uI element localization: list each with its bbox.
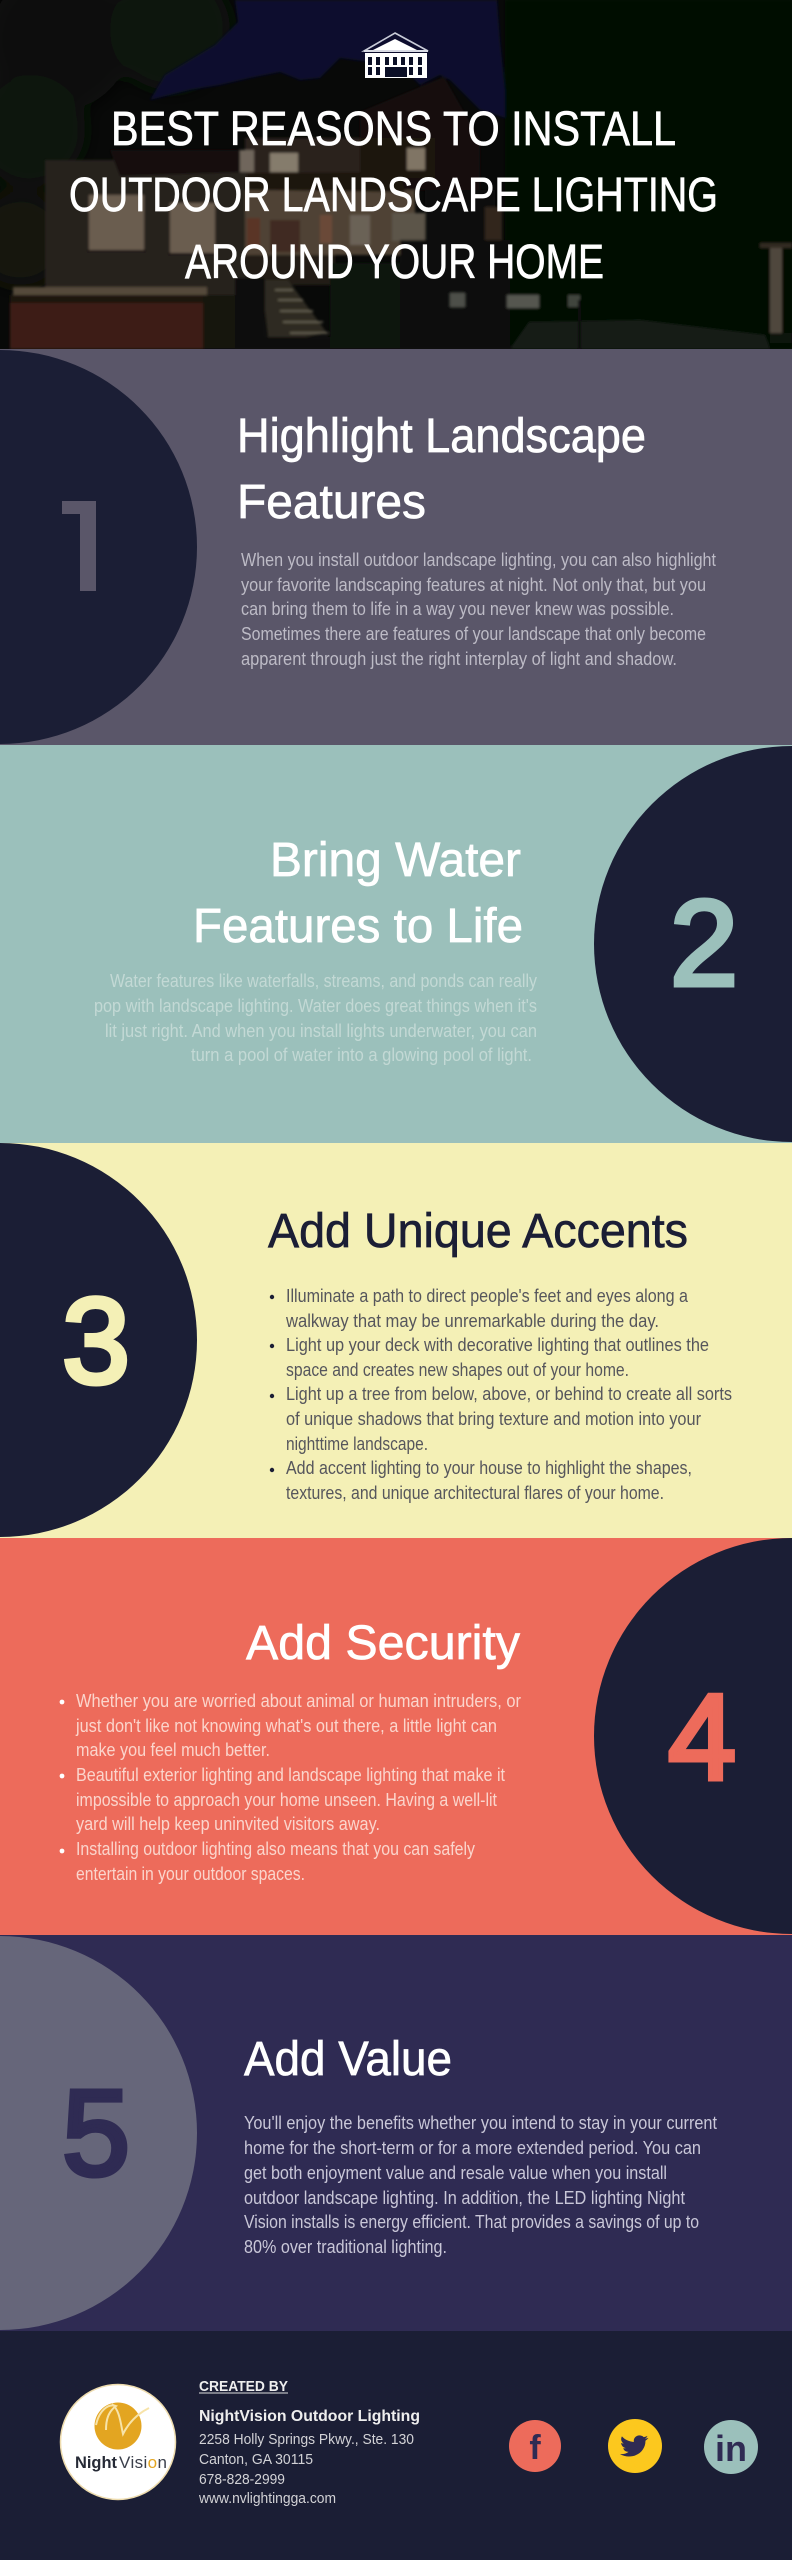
bullet list 4: yard will help keep uninvited visitors away.	[76, 1814, 380, 1834]
heading 2: Features to Life	[193, 900, 523, 953]
number circle 3: 3	[62, 1273, 130, 1409]
bullet list 4: Installing outdoor lighting also means that you can safely	[76, 1839, 475, 1859]
credits text: CREATED BY	[199, 2379, 288, 2395]
bullet list 4: make you feel much better.	[76, 1740, 270, 1760]
icon: linkedin: in	[715, 2428, 747, 2469]
panel 2: bring water features to life	[0, 745, 792, 1143]
body text 1	[241, 550, 716, 669]
bullet list 4: Beautiful exterior lighting and landscape lighting that make it	[76, 1765, 505, 1785]
footer panel	[0, 2331, 792, 2560]
body text 2: lit just right. And when you install lights underwater, you can	[105, 1021, 537, 1041]
credits text	[198, 2379, 420, 2507]
credits text: Canton, GA 30115	[199, 2452, 313, 2468]
body text 1: apparent through just the right interplay of light and shadow.	[241, 649, 677, 669]
bullet list 4	[60, 1691, 521, 1884]
heading 5: Add Value	[244, 2033, 452, 2086]
number circle 2	[594, 746, 792, 1142]
icon: facebook: f	[529, 2429, 541, 2467]
icon: house	[364, 33, 428, 78]
logo: NightVision: Vision	[119, 2453, 167, 2472]
bullet list 3: Add accent lighting to your house to highlight the shapes,	[286, 1458, 692, 1478]
body text 5: outdoor landscape lighting. In addition, the LED lighting Night	[244, 2188, 685, 2208]
body text 5	[244, 2113, 717, 2257]
credits text: www.nvlightingga.com	[198, 2491, 336, 2507]
body text 1: your favorite landscaping features at night. Not only that, but you	[241, 575, 706, 595]
credits text: 2258 Holly Springs Pkwy., Ste. 130	[199, 2432, 414, 2448]
body text 1: When you install outdoor landscape lighting, you can also highlight	[241, 550, 716, 570]
bullet list 3: textures, and unique architectural flares of your home.	[286, 1483, 664, 1503]
heading 1: Features	[237, 476, 426, 529]
heading 1	[237, 410, 646, 529]
body text 2	[94, 971, 537, 1065]
body text 5: get both enjoyment value and resale value when you install	[244, 2163, 667, 2183]
body text 1: Sometimes there are features of your landscape that only become	[241, 624, 706, 644]
title: BEST REASONS TO INSTALL	[111, 103, 676, 156]
body text 5: You'll enjoy the benefits whether you intend to stay in your current	[244, 2113, 717, 2133]
credits text: 678-828-2999	[199, 2472, 285, 2488]
number circle 1: 1	[28, 479, 96, 615]
heading 3: Add Unique Accents	[268, 1205, 688, 1258]
icon: facebook	[509, 2420, 561, 2472]
number circle 4	[594, 1538, 792, 1934]
panel 3: add unique accents	[0, 1143, 792, 1538]
panel 5: add value	[0, 1935, 792, 2331]
number circle 3	[0, 1143, 197, 1537]
credits text: NightVision Outdoor Lighting	[199, 2408, 420, 2425]
body text 5: 80% over traditional lighting.	[244, 2237, 447, 2257]
body text 2: pop with landscape lighting. Water does great things when it's	[94, 996, 537, 1016]
body text 5: home for the short-term or for a more extended period. You can	[244, 2138, 701, 2158]
body text 2: Water features like waterfalls, streams, and ponds can really	[110, 971, 537, 991]
bullet list 3: nighttime landscape.	[286, 1434, 428, 1454]
bullet list 3: of unique shadows that bring texture and motion into your	[286, 1409, 701, 1429]
body text 1: can bring them to life in a way you never knew was possible.	[241, 599, 674, 619]
heading 4: Add Security	[246, 1617, 520, 1670]
bullet list 4: impossible to approach your home unseen. Having a well-lit	[76, 1790, 497, 1810]
panel 4: add security	[0, 1538, 792, 1935]
number circle 4: 4	[668, 1669, 736, 1805]
body text 2: turn a pool of water into a glowing pool of light.	[191, 1045, 532, 1065]
bullet list 3: Light up a tree from below, above, or behind to create all sorts	[286, 1384, 732, 1404]
body text 5: Vision installs is energy efficient. That provides a savings of up to	[244, 2212, 699, 2232]
bullet list 3: walkway that may be unremarkable during the day.	[285, 1311, 659, 1331]
header panel	[0, 0, 792, 349]
logo: NightVision	[60, 2384, 176, 2500]
number circle 2: 2	[670, 875, 738, 1011]
heading 1: Highlight Landscape	[237, 410, 646, 463]
bullet list 3: Illuminate a path to direct people's feet and eyes along a	[286, 1286, 689, 1306]
icon: twitter	[608, 2419, 662, 2473]
icon: linkedin	[704, 2420, 758, 2474]
heading 2	[193, 834, 523, 953]
panel 1: highlight landscape features	[0, 349, 792, 745]
logo: NightVision: Night	[75, 2453, 117, 2472]
heading 2: Bring Water	[270, 834, 521, 887]
number circle 1	[0, 350, 197, 744]
number circle 5: 5	[62, 2065, 130, 2201]
bullet list 4: just don't like not knowing what's out there, a little light can	[75, 1716, 497, 1736]
bullet list 4: Whether you are worried about animal or human intruders, or	[76, 1691, 521, 1711]
title	[69, 103, 718, 289]
bullet list 3	[270, 1286, 732, 1503]
bullet list 3: space and creates new shapes out of your home.	[286, 1360, 629, 1380]
bullet list 3: Light up your deck with decorative lighting that outlines the	[286, 1335, 709, 1355]
night photo of a lit house	[0, 0, 792, 349]
title: AROUND YOUR HOME	[185, 236, 604, 289]
number circle 5	[0, 1936, 197, 2330]
bullet list 4: entertain in your outdoor spaces.	[76, 1864, 305, 1884]
